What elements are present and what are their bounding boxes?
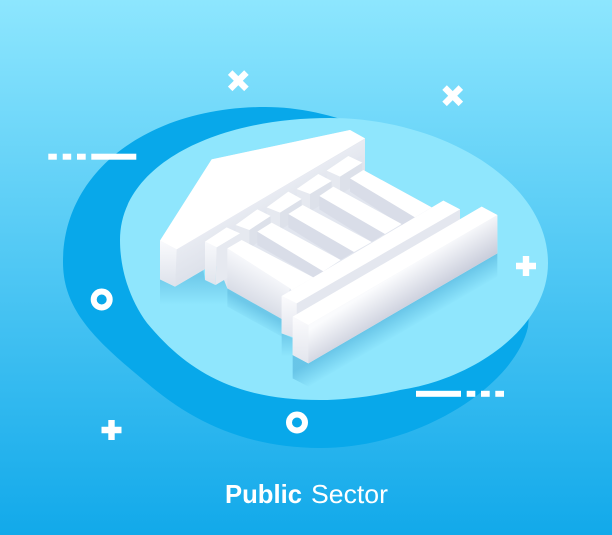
title: Public Sector: [225, 479, 388, 509]
roof front wall: [175, 139, 365, 287]
dark blue blob: [63, 107, 529, 448]
lower step: [293, 207, 497, 363]
upper step: [282, 201, 460, 338]
building reflection: [160, 253, 497, 387]
columns: [227, 170, 432, 319]
icon: plus right: [516, 256, 536, 276]
icon: cross top: [222, 64, 255, 97]
building: isometric bank icon: [160, 130, 497, 387]
icon: ring left: [94, 292, 110, 308]
roof top: [160, 130, 365, 249]
dashed line: bottom right: [416, 391, 504, 397]
column caps: [205, 156, 362, 285]
icon: cross top right: [436, 79, 469, 112]
light blue blob: [120, 118, 548, 400]
dashed line: top left: [48, 154, 136, 160]
icon: plus bottom left: [102, 420, 122, 440]
roof underlay: [160, 130, 365, 287]
roof end wall: [160, 241, 177, 287]
title bold word: Public: [225, 479, 302, 509]
column recess: [205, 155, 433, 300]
title regular word: Sector: [311, 479, 388, 509]
icon: ring bottom: [289, 414, 305, 430]
